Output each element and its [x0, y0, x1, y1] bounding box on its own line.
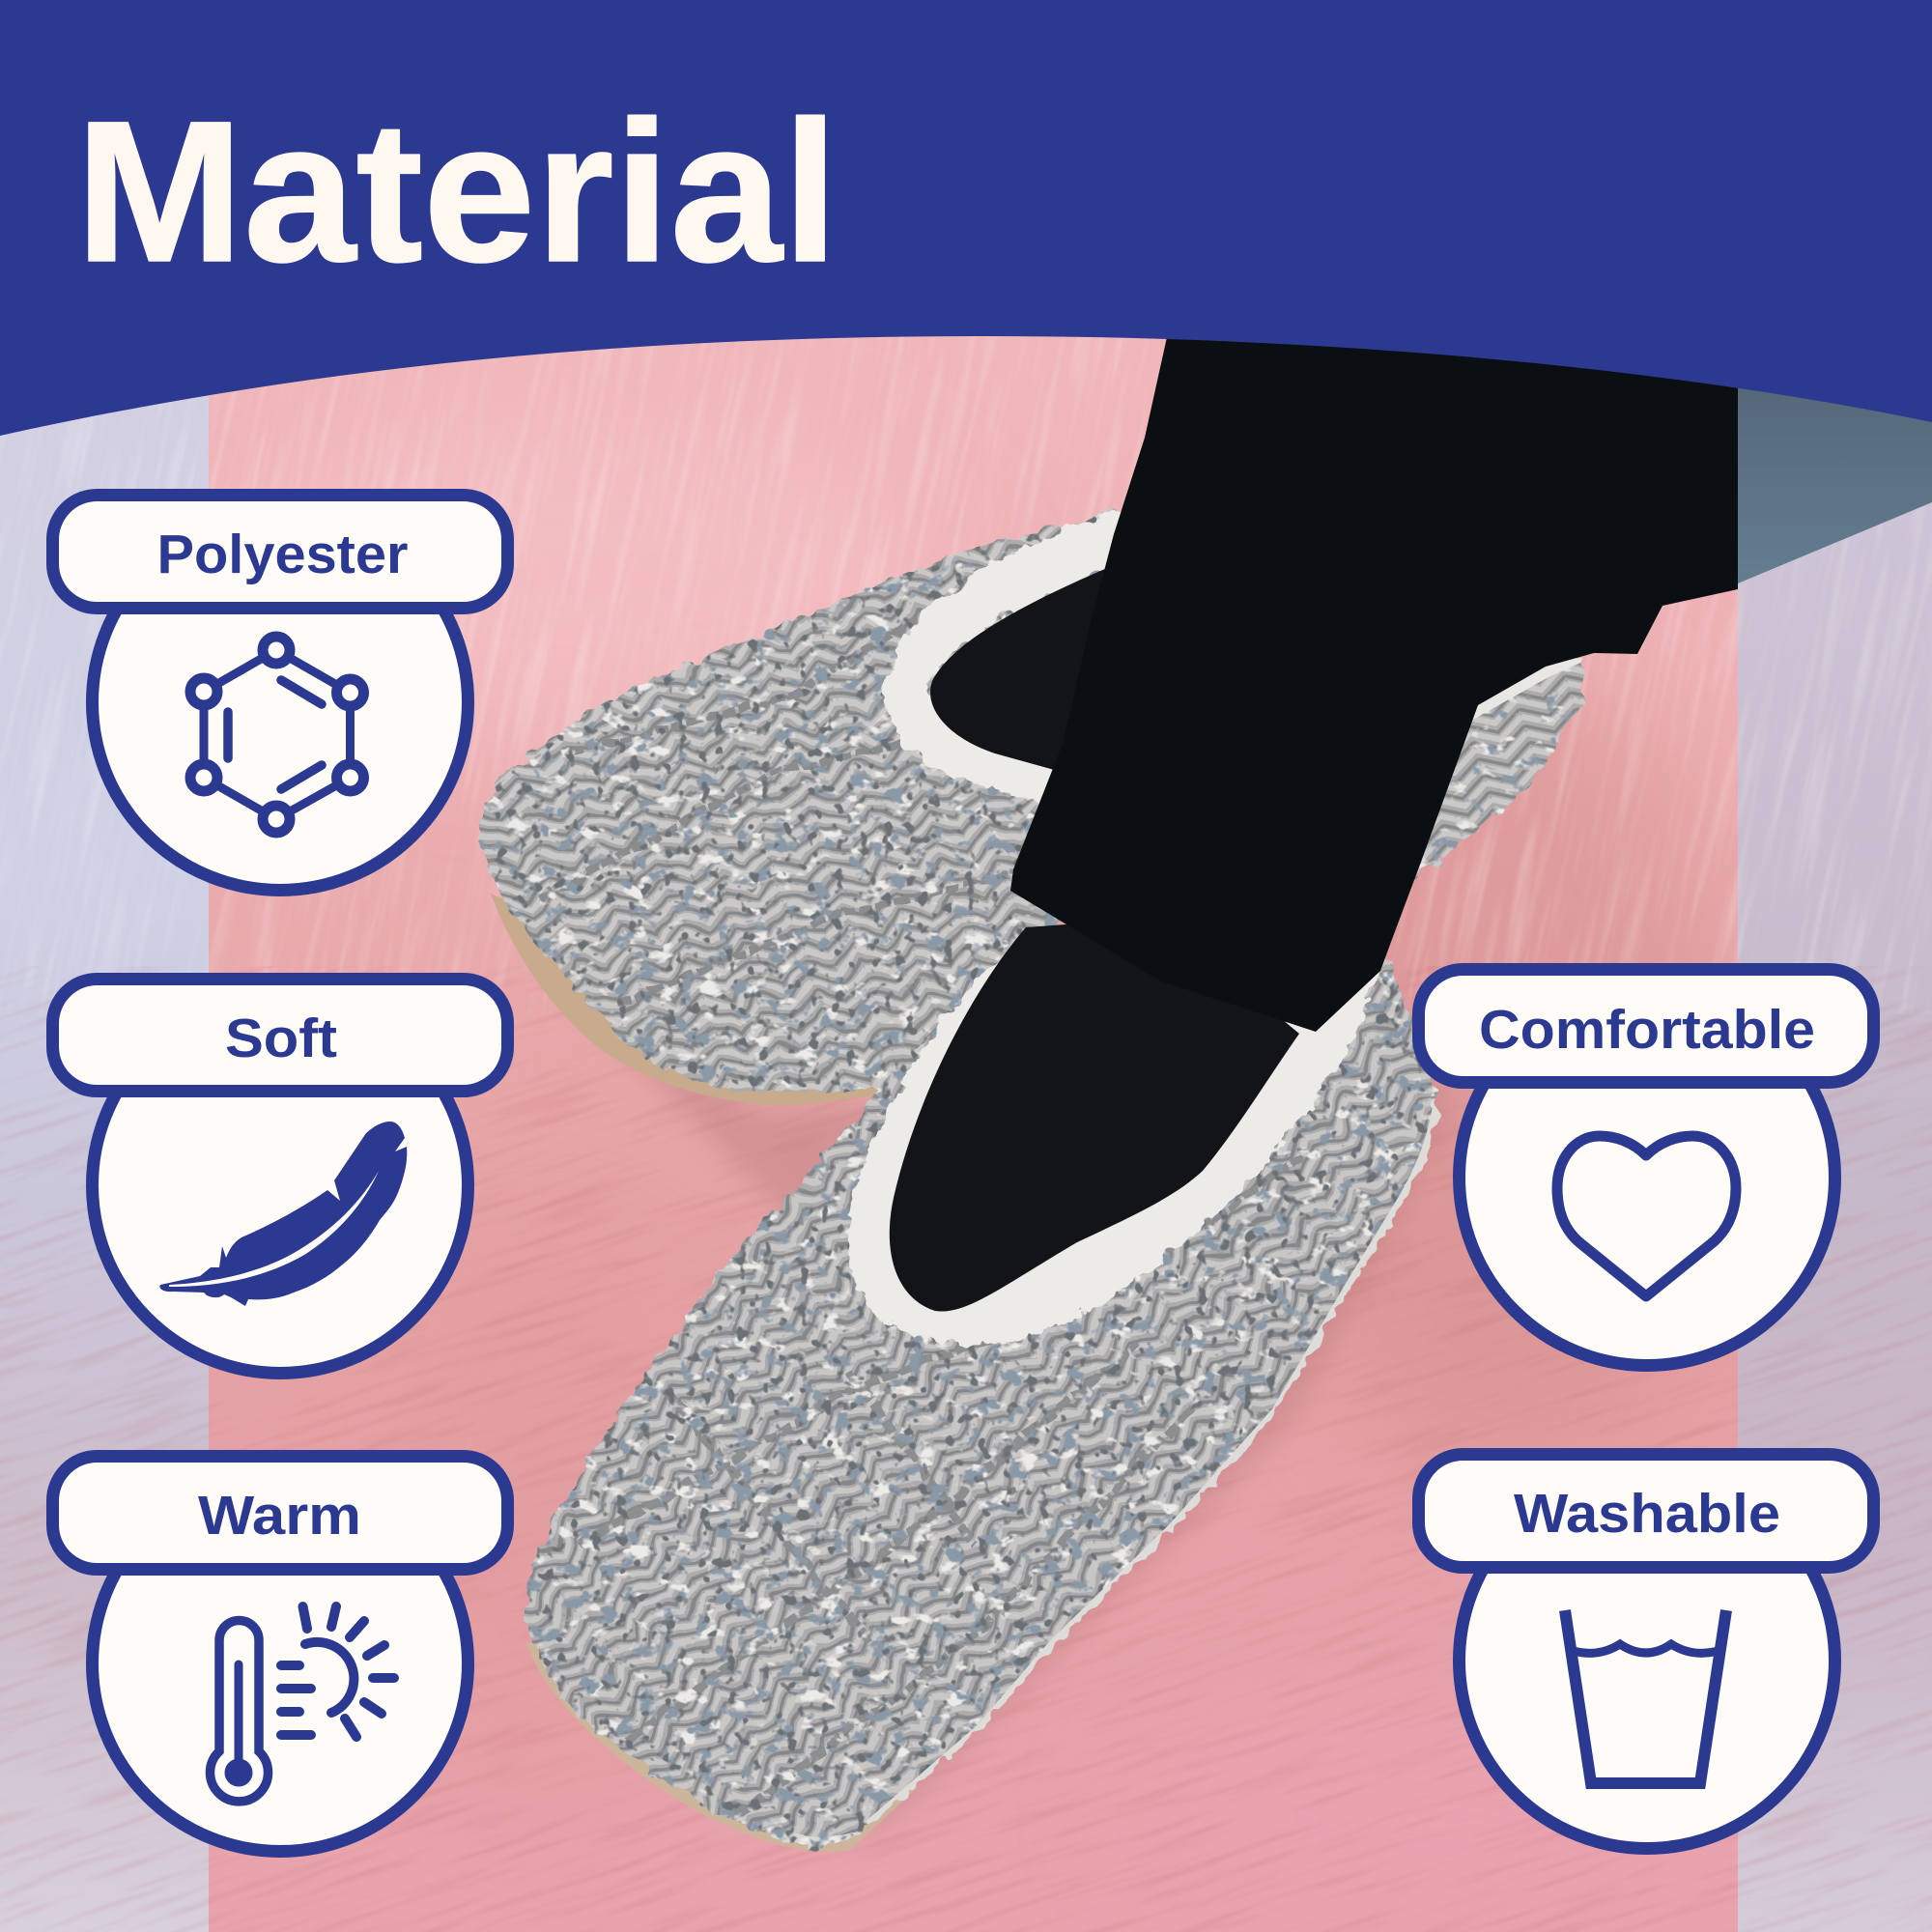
- badge label pill: [1418, 970, 1874, 1082]
- badge circle: [1459, 989, 1835, 1366]
- badge label pill: [52, 980, 508, 1092]
- far slipper: [1414, 658, 1586, 880]
- label text: Warm: [198, 1485, 361, 1547]
- back slipper knit: [477, 508, 1117, 1094]
- badge label pill: [52, 495, 508, 609]
- label text: Washable: [1514, 1483, 1780, 1545]
- soft shadow under slippers: [541, 908, 1449, 1850]
- icon: water glass: [1565, 1610, 1726, 1783]
- header banner: [0, 0, 1932, 436]
- badge: Soft: [52, 980, 508, 1374]
- badge label pill: [1418, 1455, 1874, 1567]
- icon: benzene molecule: [190, 637, 363, 833]
- icon: feather: [159, 1122, 407, 1306]
- label text: Polyester: [156, 524, 408, 585]
- badge: Washable: [1418, 1455, 1874, 1849]
- title: Material: [75, 80, 838, 304]
- photo: slippers and legs: [464, 328, 1738, 1864]
- badge circle: [93, 997, 468, 1374]
- icon: heart: [1557, 1136, 1736, 1296]
- badge: Polyester: [52, 495, 508, 891]
- badge: Comfortable: [1418, 970, 1874, 1366]
- icon: thermometer and sun: [211, 1606, 394, 1802]
- front slipper sole: [526, 1642, 918, 1852]
- label text: Soft: [225, 1008, 337, 1069]
- badge circle: [93, 514, 468, 891]
- label text: Comfortable: [1479, 999, 1815, 1061]
- grey-blue fabric behind right strip: [1738, 386, 1932, 583]
- badge circle: [1459, 1472, 1835, 1849]
- front sock: [890, 918, 1299, 1312]
- badge circle: [93, 1476, 468, 1851]
- front slipper knit: [512, 927, 1449, 1864]
- badge label pill: [52, 1457, 508, 1569]
- black trousers: [1010, 328, 1738, 1032]
- back slipper sole: [491, 894, 889, 1105]
- back sock: [930, 568, 1140, 771]
- badge: Warm: [52, 1457, 508, 1851]
- back slipper fleece collar: [887, 510, 1125, 811]
- front slipper fleece collar: [847, 937, 1381, 1345]
